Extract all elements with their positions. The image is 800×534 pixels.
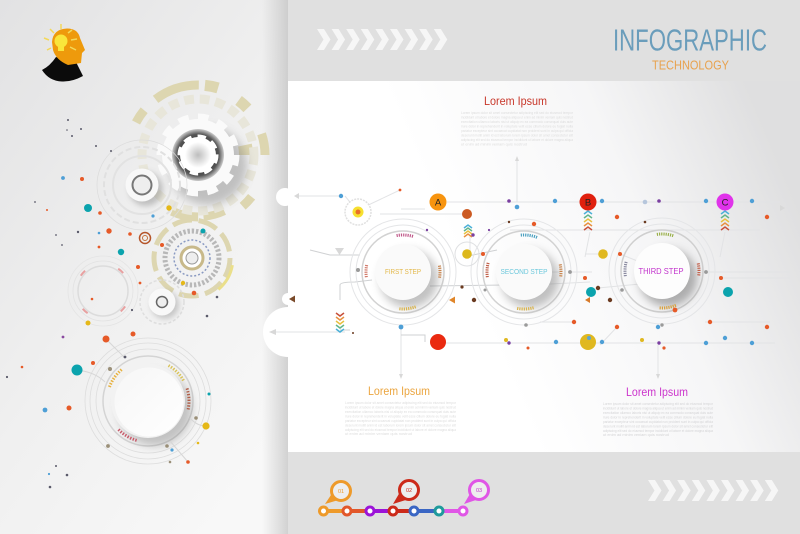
text block: right paragraph: [603, 402, 714, 437]
scattered dots: right page: [289, 189, 769, 350]
text block: left paragraph: deserunt mollit anim id est laborum lorem ipsum dolor sit amet consectetur elit: [345, 424, 456, 428]
pin 02: 02: [406, 488, 412, 494]
gear shadow: [169, 127, 247, 205]
marker: C: [716, 194, 734, 210]
pin 02: [393, 480, 418, 504]
text block: left paragraph: incididunt ut labore et dolore magna aliqua ut enim ad minim veniam quis nostrud: [345, 406, 456, 410]
heading: top lorem ipsum: Lorem Ipsum: [484, 96, 547, 108]
text block: top paragraph: [461, 111, 574, 146]
panel: bottom band: [288, 452, 800, 534]
heading: right lorem ipsum: Lorem Ipsum: [626, 387, 688, 399]
circuit lines: [272, 160, 790, 375]
panel: top band: [288, 0, 800, 81]
panel: second step disc: [471, 219, 577, 325]
label: first step: FIRST STEP: [385, 267, 421, 276]
marker: A: A: [435, 198, 442, 208]
target icon: [140, 232, 150, 244]
pin 01: [325, 482, 350, 504]
gear hole: [172, 129, 224, 181]
marker: A: [430, 194, 446, 210]
marker: B: [580, 194, 596, 210]
text block: right paragraph: Lorem ipsum dolor sit amet consectetur adipiscing elit sed do eiusmod tempor: [603, 402, 714, 406]
text block: top paragraph: Lorem ipsum dolor sit amet consectetur adipiscing elit sed do eiusmod tempor: [461, 111, 574, 115]
timeline with pins: [320, 480, 488, 515]
label: third step: THIRD STEP: [638, 266, 684, 276]
text block: left paragraph: ut enim ad minim veniam quis nostrud: [345, 432, 412, 436]
icon: bulb node: [345, 199, 371, 225]
text block: top paragraph: incididunt ut labore et dolore magna aliqua ut enim ad minim veniam quis nostrud: [461, 116, 573, 120]
text block: right paragraph: pariatur excepteur sint occaecat cupidatat non proident sunt in culpa qui officia: [603, 420, 713, 424]
text block: top paragraph: exercitation ullamco laboris nisi ut aliquip ex ea commodo consequat duis aute: [461, 120, 573, 124]
chart: large gear with khaki technical ring: [128, 85, 268, 225]
text block: left paragraph: Lorem ipsum dolor sit amet consectetur adipiscing elit sed do eiusmod tempor: [345, 401, 457, 405]
label: second step: SECOND STEP: [500, 267, 548, 276]
text block: right paragraph: irure dolor in reprehenderit in voluptate velit esse cillum dolore eu fugiat nulla: [603, 416, 713, 420]
page tabs: [263, 188, 313, 357]
panel: right page background: [288, 81, 800, 452]
pin 01: 01: [338, 489, 344, 495]
text block: right paragraph: exercitation ullamco laboris nisi ut aliquip ex ea commodo consequat duis aute: [603, 411, 713, 415]
large red and yellow nodes: [430, 209, 733, 350]
gear body: [162, 119, 234, 191]
text block: right paragraph: incididunt ut labore et dolore magna aliqua ut enim ad minim veniam quis nostrud: [603, 406, 713, 410]
text block: right paragraph: ut enim ad minim veniam quis nostrud: [603, 433, 669, 437]
subtitle: TECHNOLOGY: [652, 58, 729, 72]
text block: left paragraph: [345, 401, 457, 436]
arrow tips: [269, 156, 785, 379]
text block: right paragraph: deserunt mollit anim id est laborum lorem ipsum dolor sit amet consectetur elit: [603, 424, 713, 428]
text block: top paragraph: irure dolor in reprehenderit in voluptate velit esse cillum dolore eu fugiat nulla: [461, 124, 573, 128]
icon: yellow node between steps: [455, 242, 479, 266]
chart: khaki middle gear: [151, 217, 233, 299]
chevrons: up and down stacks: [336, 211, 729, 332]
panel: left page background: [0, 0, 288, 534]
pin 03: 03: [476, 488, 482, 494]
text block: top paragraph: adipiscing elit sed do eiusmod tempor incididunt ut labore et dolore magna aliqua: [461, 138, 573, 142]
text block: left paragraph: irure dolor in reprehenderit in voluptate velit esse cillum dolore eu fugiat nulla: [345, 414, 456, 418]
icon: head with light bulb: [42, 24, 85, 82]
text block: top paragraph: ut enim ad minim veniam quis nostrud: [461, 142, 527, 146]
chart: small gear upper left: [97, 140, 187, 230]
heading: left lorem ipsum: Lorem Ipsum: [368, 386, 430, 398]
text block: top paragraph: deserunt mollit anim id est laborum lorem ipsum dolor sit amet consectetur elit: [461, 134, 573, 138]
pin 03: [464, 480, 488, 504]
arrows: top chevrons: [317, 29, 447, 50]
chart: empty ring: [68, 256, 138, 326]
text block: top paragraph: pariatur excepteur sint occaecat cupidatat non proident sunt in culpa qui officia: [461, 129, 573, 133]
chart: small gear lower: [140, 280, 184, 324]
text block: left paragraph: adipiscing elit sed do eiusmod tempor incididunt ut labore et dolore magna aliqua: [345, 428, 456, 432]
panel: third step disc: [609, 218, 715, 324]
marker: C: C: [722, 198, 729, 208]
chart: large white disc: [77, 338, 211, 464]
scattered dots: left page: [6, 119, 218, 488]
text block: left paragraph: exercitation ullamco laboris nisi ut aliquip ex ea commodo consequat duis aute: [345, 410, 456, 414]
text block: right paragraph: adipiscing elit sed do eiusmod tempor incididunt ut labore et dolore magna aliqua: [603, 429, 713, 433]
panel: first step disc: [350, 219, 456, 325]
arrows: bottom chevrons: [648, 480, 778, 501]
marker: B: B: [585, 198, 591, 208]
khaki segmented ring: [128, 85, 268, 225]
text block: left paragraph: pariatur excepteur sint occaecat cupidatat non proident sunt in culpa qui officia: [345, 419, 456, 423]
